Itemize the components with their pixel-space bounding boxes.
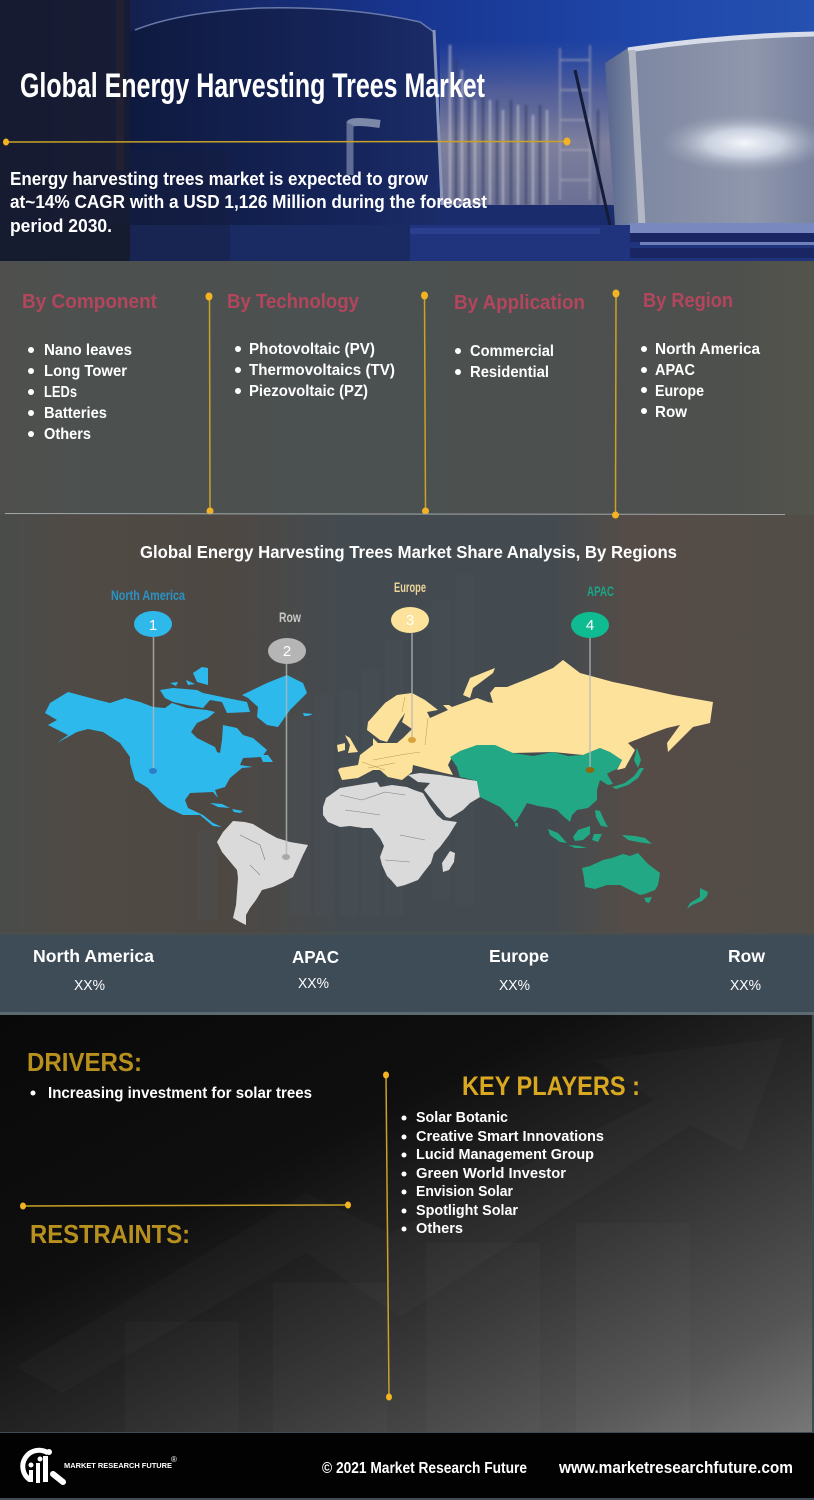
panel: By Component: [22, 290, 157, 443]
title: Global Energy Harvesting Trees Market: [20, 67, 485, 105]
panel: By Region: Europe: [655, 383, 704, 400]
panel: key players: Spotlight Solar: [416, 1203, 518, 1219]
divider: vertical gold line 1: [206, 292, 214, 514]
map pin 3: Europe: Europe: [394, 579, 426, 595]
panel: By Technology: By Technology: [227, 290, 360, 313]
map pin 2: Row: 2: [283, 643, 291, 660]
panel: key players: Solar Botanic: [416, 1110, 508, 1126]
share: Row: XX%: [730, 978, 761, 994]
map pin 2: Row: [268, 609, 306, 860]
map pin 4: APAC: APAC: [587, 583, 614, 599]
divider: vertical gold line in lower panel: [383, 1072, 392, 1400]
panel: header photo background: [0, 0, 814, 261]
intro text: [10, 169, 487, 236]
share: North America: [33, 946, 154, 994]
panel: By Technology: Photovoltaic (PV): [249, 341, 375, 358]
divider: horizontal rule under segments: [5, 512, 785, 518]
panel: By Component: Batteries: [44, 405, 107, 422]
map pin 1: North America: North America: [111, 587, 185, 603]
panel: By Application: Residential: [470, 364, 549, 381]
map pin 1: North America: [111, 587, 185, 774]
map region: South America and Africa: [217, 773, 480, 925]
panel: drivers: DRIVERS:: [27, 1047, 142, 1077]
map pin 4: APAC: 4: [586, 617, 594, 634]
map pin 1: North America: 1: [149, 617, 157, 634]
panel: key players: KEY PLAYERS :: [462, 1071, 640, 1101]
panel: drivers: Increasing investment for solar trees: [48, 1085, 312, 1102]
divider: vertical gold line 3: [612, 290, 620, 515]
panel: key players: [402, 1071, 640, 1237]
panel: By Region: North America: [655, 341, 760, 358]
panel: restraints: RESTRAINTS:: [30, 1219, 190, 1249]
panel: map section background: [0, 515, 814, 935]
share: Row: Row: [728, 946, 765, 966]
share: APAC: XX%: [298, 976, 329, 992]
map pin 3: Europe: [391, 579, 429, 743]
website: www.marketresearchfuture.com: [558, 1459, 793, 1477]
share: North America: XX%: [74, 978, 105, 994]
panel: By Application: [454, 291, 585, 381]
share: North America: North America: [33, 946, 154, 966]
share: APAC: [292, 947, 339, 992]
panel: By Region: [641, 289, 760, 421]
panel: By Component: Long Tower: [44, 363, 127, 380]
intro text: Energy harvesting trees market is expected to grow: [10, 169, 429, 189]
panel: By Region: APAC: [655, 362, 695, 379]
panel: By Component: Others: [44, 426, 91, 443]
share: APAC: APAC: [292, 947, 339, 967]
map pin 3: Europe: 3: [406, 612, 414, 629]
map region: Asia Pacific: [450, 745, 708, 909]
intro text: at~14% CAGR with a USD 1,126 Million during the forecast: [10, 192, 487, 212]
panel: By Region: Row: [655, 404, 688, 421]
panel: drivers: [27, 1047, 312, 1102]
intro text: period 2030.: [10, 216, 112, 236]
divider: vertical gold line 2: [421, 292, 429, 514]
share: Europe: Europe: [489, 946, 549, 966]
logo: market research future: ®: [171, 1455, 177, 1464]
heading: market share analysis: Global Energy Harvesting Trees Market Share Analysis, By Regions: [140, 542, 677, 562]
panel: By Region: By Region: [643, 289, 733, 312]
panel: key players: Others: [416, 1221, 463, 1237]
logo: market research future: MARKET RESEARCH FUTURE: [64, 1461, 172, 1470]
panel: By Component: By Component: [22, 290, 157, 313]
map pin 4: APAC: [571, 583, 614, 773]
panel: key players: Lucid Management Group: [416, 1147, 594, 1163]
map region: North America: [45, 667, 313, 827]
panel: By Technology: Thermovoltaics (TV): [249, 362, 395, 379]
panel: By Component: Nano leaves: [44, 342, 132, 359]
divider: gold line between drivers and restraints: [20, 1202, 351, 1210]
map pin 2: Row: Row: [279, 609, 301, 625]
share: Europe: XX%: [499, 978, 530, 994]
share: Row: [728, 946, 765, 994]
panel: key players: Green World Investor: [416, 1166, 566, 1182]
panel: key players: Creative Smart Innovations: [416, 1129, 604, 1145]
panel: footer: [0, 1433, 814, 1500]
panel: By Application: By Application: [454, 291, 585, 314]
panel: regional share strip: [0, 935, 814, 1015]
panel: By Application: Commercial: [470, 343, 554, 360]
logo: market research future: [23, 1449, 177, 1483]
share: Europe: [489, 946, 549, 994]
panel: By Technology: [227, 290, 395, 400]
panel: segmentation background: [0, 261, 814, 515]
panel: drivers, restraints and players background: [0, 1015, 812, 1432]
chart: world map by region: [45, 579, 713, 925]
divider: gold line under title: [3, 138, 570, 146]
copyright: © 2021 Market Research Future: [322, 1460, 527, 1477]
panel: By Component: LEDs: [44, 384, 77, 401]
panel: By Technology: Piezovoltaic (PZ): [249, 383, 368, 400]
map region: Europe and Russia: [337, 660, 713, 780]
panel: key players: Envision Solar: [416, 1184, 513, 1200]
